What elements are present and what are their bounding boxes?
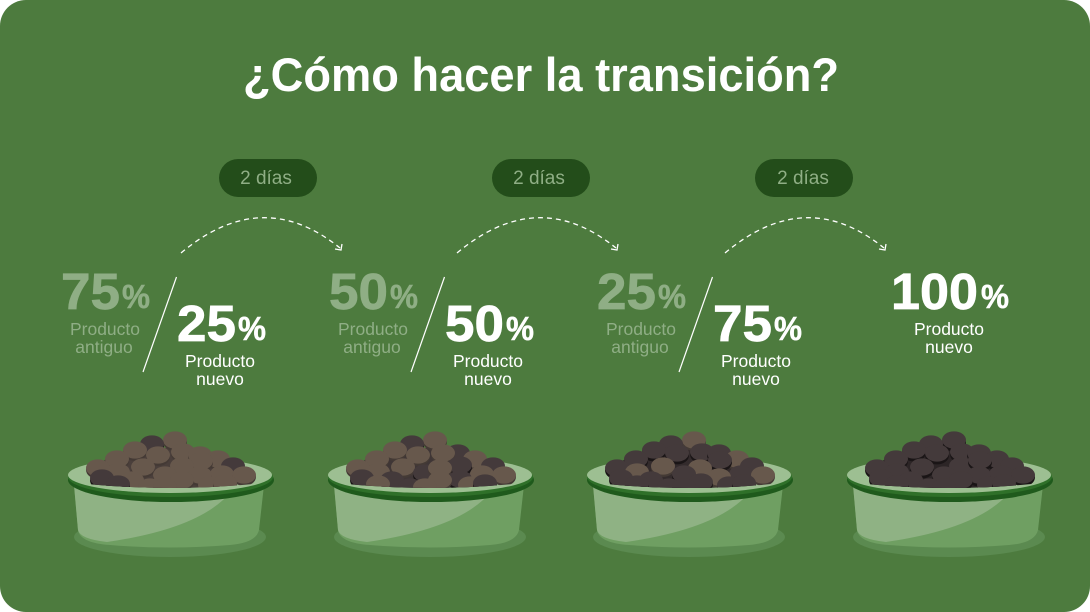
new product 25%: nuevo [196, 369, 244, 389]
new product 25%: Producto [185, 351, 255, 371]
arrow 3 [725, 218, 886, 253]
new product 75% [713, 295, 802, 389]
new product 75%: 75 [713, 295, 772, 352]
new product 75%: nuevo [732, 369, 780, 389]
bowl 3: 25% old, 75% new [587, 431, 793, 557]
new product 50% [445, 295, 534, 389]
old product 50%: 50 [329, 263, 388, 320]
old product 25%: 25 [597, 263, 656, 320]
old product 75% [61, 263, 150, 357]
bowl 1: 75% old, 25% new [68, 431, 274, 557]
new product 25% [177, 295, 266, 389]
old product 50% [329, 263, 418, 357]
bowl 2: 50% old, 50% new [328, 431, 534, 557]
arrow 1 [181, 218, 342, 253]
new product 25%: % [238, 310, 266, 347]
duration pill 2: 2 días [513, 168, 565, 189]
step 4 percentages: new product 100%: % [981, 278, 1009, 315]
new product 50%: 50 [445, 295, 504, 352]
duration pill 3: 2 días [777, 168, 829, 189]
duration pill 2 [492, 159, 590, 197]
duration pill 3 [755, 159, 853, 197]
new product 50%: % [506, 310, 534, 347]
new product 50%: nuevo [464, 369, 512, 389]
duration pill 1: 2 días [240, 168, 292, 189]
step 1 percentages [61, 263, 266, 389]
step 4 percentages: new product 100% [891, 263, 1009, 357]
step 4 percentages: new product 100%: 100 [891, 263, 978, 320]
step 3 percentages [597, 263, 802, 389]
step 4 percentages: new product 100%: nuevo [925, 337, 973, 357]
old product 50%: Producto [338, 319, 408, 339]
old product 50%: % [390, 278, 418, 315]
old product 75%: 75 [61, 263, 120, 320]
title: ¿Cómo hacer la transición? [243, 48, 839, 101]
new product 50%: Producto [453, 351, 523, 371]
old product 75%: Producto [70, 319, 140, 339]
old product 25%: antiguo [611, 337, 669, 357]
arrow 2 [457, 218, 618, 253]
new product 75%: % [774, 310, 802, 347]
old product 25% [597, 263, 686, 357]
old product 75%: % [122, 278, 150, 315]
old product 25%: % [658, 278, 686, 315]
step 4 percentages: new product 100%: Producto [914, 319, 984, 339]
step 2 percentages [329, 263, 534, 389]
old product 75%: antiguo [75, 337, 133, 357]
new product 25%: 25 [177, 295, 236, 352]
old product 50%: antiguo [343, 337, 401, 357]
duration pill 1 [219, 159, 317, 197]
old product 25%: Producto [606, 319, 676, 339]
bowl 4: 100% new [847, 431, 1053, 557]
new product 75%: Producto [721, 351, 791, 371]
